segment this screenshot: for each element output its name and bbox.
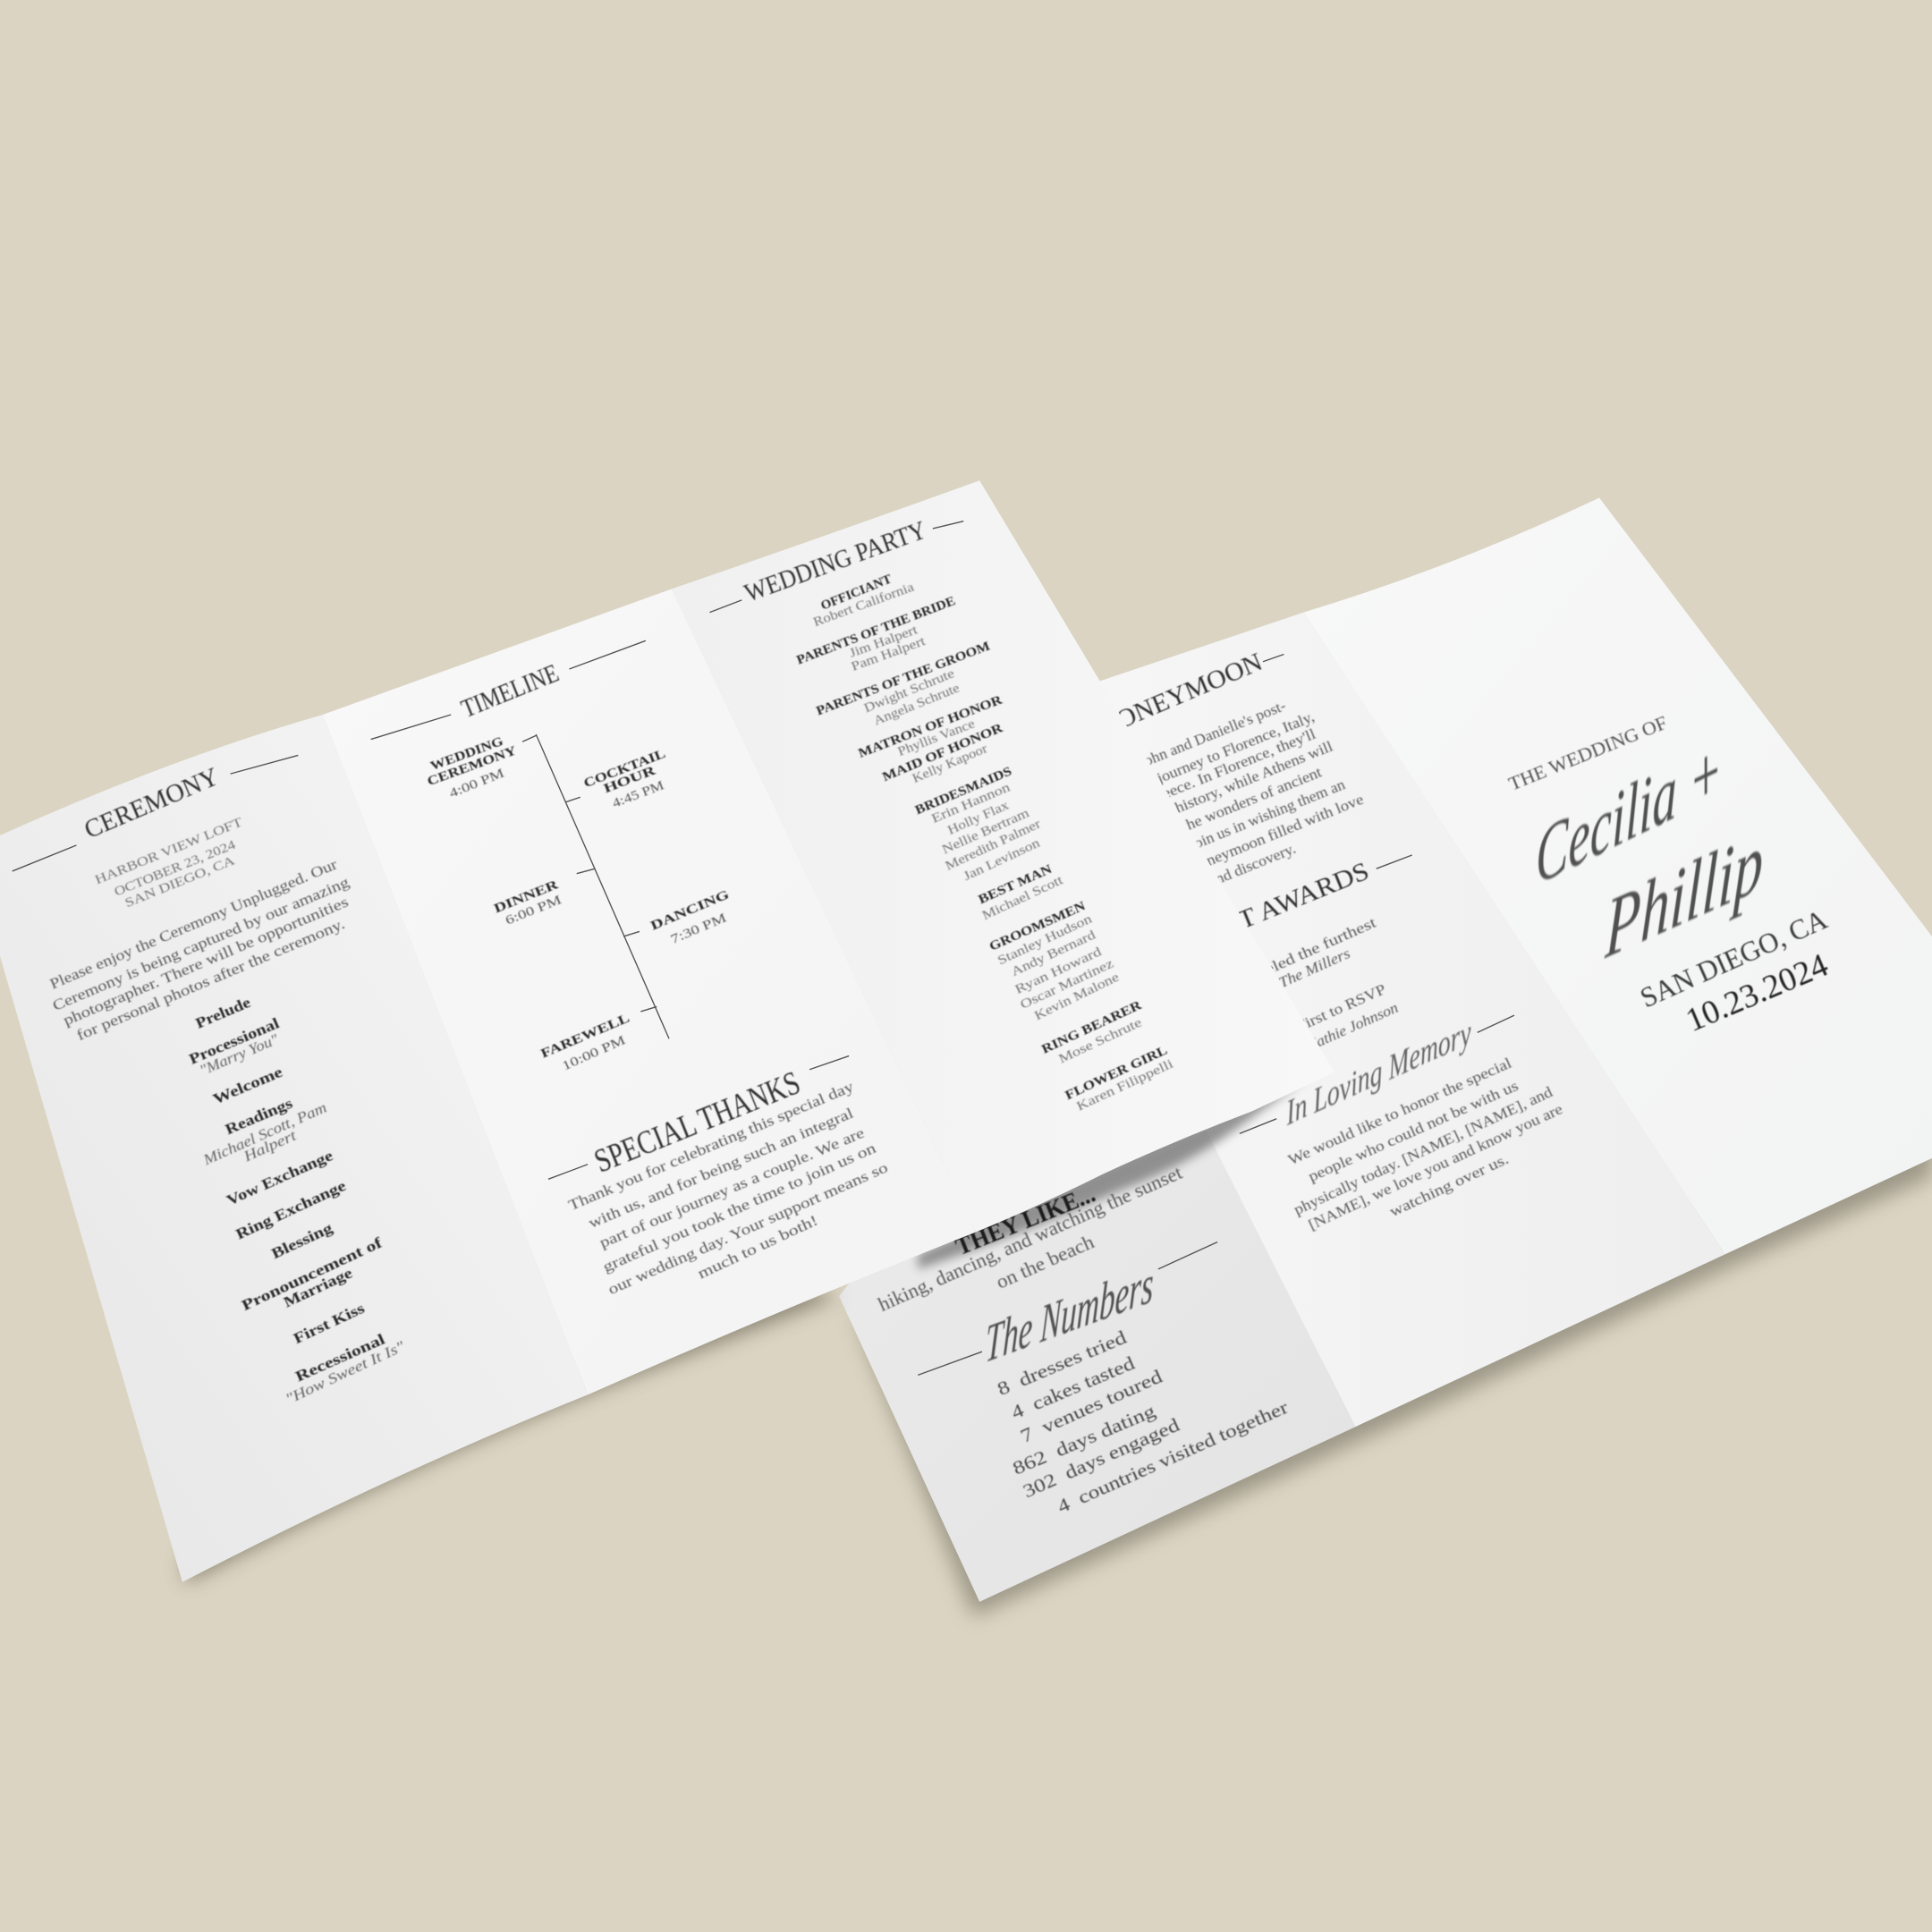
cover text [1506, 714, 1834, 1039]
heading: special thanks: SPECIAL THANKS [589, 1064, 805, 1181]
list: wedding party: PARENTS OF THE BRIDE [794, 594, 957, 668]
text block: honeymoon: and Greece. In Florence, they'll [1117, 725, 1318, 819]
text block: venue: HARBOR VIEW LOFT [93, 815, 245, 887]
cover: name one: Cecilia + [1536, 724, 1722, 902]
list: wedding party: Jan Levinson [962, 836, 1042, 884]
text block: special thanks: much to us both! [695, 1212, 820, 1283]
text block: venue: OCTOBER 23, 2024 [113, 838, 238, 900]
cover: date: 10.23.2024 [1681, 946, 1834, 1039]
timeline events: 4:45 PM [610, 778, 666, 811]
shadow: cast by upper brochure on lower brochure [918, 1078, 1306, 1269]
text block: honeymoon: Please join us in wishing them an [1147, 775, 1348, 870]
text block: guest awards: Traveled the furthest [1231, 914, 1378, 992]
heading: wedding party: WEDDING PARTY [741, 516, 930, 608]
text block: unplugged note [47, 855, 352, 1044]
list: wedding party: Ryan Howard [1013, 945, 1105, 997]
list: wedding party: Michael Scott [980, 873, 1065, 923]
list: order of service: "Marry You" [197, 1030, 282, 1079]
list: order of service: Pronouncement of [239, 1234, 385, 1314]
text block: in loving memory: physically today. [NAME], [NAME], and [1291, 1083, 1555, 1218]
list: wedding party: BRIDESMAIDS [913, 764, 1014, 818]
cover: name two: Phillip [1603, 812, 1765, 978]
panel: timeline [323, 589, 976, 1394]
list: wedding party: MATRON OF HONOR [856, 692, 1004, 761]
timeline events: 6:00 PM [504, 893, 564, 928]
text block: honeymoon [1099, 697, 1366, 890]
list: order of service: Readings [223, 1095, 295, 1138]
list: order of service: "How Sweet It Is" [283, 1337, 408, 1408]
text block: special thanks: part of our journey as a couple. We are [597, 1124, 867, 1251]
text block: special thanks: Thank you for celebrating this special day [566, 1078, 856, 1214]
timeline events: 10:00 PM [560, 1033, 628, 1074]
timeline events: 4:00 PM [447, 767, 506, 801]
list: wedding party: Andy Bernard [1009, 928, 1098, 979]
heading: in loving memory: In Loving Memory [1284, 1013, 1472, 1134]
list: order of service: Ring Exchange [233, 1177, 349, 1243]
timeline events: HOUR [602, 763, 658, 796]
list: wedding party: Pam Halpert [850, 634, 928, 674]
heading: ceremony: CEREMONY [80, 762, 223, 844]
list: order of service: Blessing [268, 1219, 335, 1262]
timeline events: 7:30 PM [669, 911, 729, 947]
heading: in loving memory [1240, 1013, 1514, 1134]
list: wedding party: Dwight Schrute [862, 666, 956, 716]
heading: timeline [371, 640, 646, 740]
text block: guest awards: First to RSVP [1293, 980, 1388, 1035]
text block: guest awards: The Millers [1276, 945, 1353, 991]
list: wedding party: OFFICIANT [818, 572, 894, 614]
text block: they like: THEY LIKE... [952, 1179, 1099, 1260]
list: wedding party: FLOWER GIRL [1063, 1043, 1170, 1103]
text block: special thanks: our wedding day. Your support means so [606, 1159, 890, 1298]
list: wedding party [794, 572, 1175, 1114]
text block: unplugged note: Please enjoy the Ceremony Unplugged. Our [47, 855, 340, 993]
list: order of service [187, 994, 408, 1408]
list: wedding party: Kevin Malone [1032, 970, 1122, 1023]
text block: honeymoon: wedding journey to Florence, Italy, [1099, 708, 1317, 809]
list: order of service: Welcome [210, 1063, 285, 1108]
text block: in loving memory: watching over us. [1386, 1150, 1512, 1220]
text block: unplugged note: photographer. There will be opportunities [61, 893, 352, 1030]
cover: location: SAN DIEGO, CA [1636, 903, 1832, 1013]
panel: ceremony [0, 715, 588, 1582]
list: wedding party: Angela Schrute [872, 681, 962, 728]
panel: cover [1303, 498, 1932, 1254]
list: wedding party: Phyllis Vance [896, 716, 977, 759]
list: wedding party: Jim Halpert [847, 623, 919, 661]
timeline events: FAREWELL [538, 1011, 632, 1062]
text block: venue [93, 815, 245, 911]
list: wedding party: GROOMSMEN [987, 899, 1089, 954]
list: order of service: Prelude [193, 994, 253, 1032]
text block: in loving memory: We would like to honor the special [1285, 1055, 1514, 1168]
timeline events: COCKTAIL [582, 747, 668, 791]
heading: guest awards: GUEST AWARDS [1165, 857, 1373, 962]
heading: honeymoon: HONEYMOON [1094, 648, 1267, 742]
list: order of service: Processional [187, 1014, 282, 1068]
heading: the numbers: The Numbers [985, 1252, 1155, 1375]
text block: they like: on the beach [993, 1230, 1097, 1293]
heading: ceremony [13, 755, 298, 871]
heading: the numbers [918, 1242, 1217, 1375]
text block: honeymoon: and discovery. [1206, 840, 1298, 890]
list: wedding party: Mose Schrute [1056, 1016, 1144, 1067]
list: the numbers: 4 cakes tasted [1009, 1353, 1139, 1423]
heading: timeline: TIMELINE [457, 659, 563, 724]
text block: guest awards [1231, 914, 1401, 1055]
lower brochure [839, 498, 1932, 1602]
list: wedding party: RING BEARER [1039, 998, 1144, 1057]
list: order of service: Vow Exchange [224, 1147, 335, 1209]
mockup scene [0, 480, 1932, 1623]
list: the numbers: 8 dresses tried [995, 1327, 1131, 1400]
text block: they like: hiking, dancing, and watching the sunset [875, 1161, 1185, 1316]
list: wedding party: Erin Hannon [929, 780, 1013, 826]
list: wedding party: Stanley Hudson [996, 912, 1094, 968]
text block: in loving memory: [NAME], we love you and know you are [1306, 1100, 1565, 1233]
list: wedding party: Meredith Palmer [943, 817, 1043, 874]
list: wedding party: Nellie Bertram [940, 806, 1032, 857]
list: the numbers: 302 days engaged [1021, 1415, 1183, 1502]
upper brochure [0, 480, 1335, 1582]
panel: wedding party [672, 480, 1335, 1233]
text block: honeymoon: offer the wonders of ancient [1147, 763, 1325, 849]
list: wedding party: Oscar Martinez [1018, 956, 1116, 1013]
list: wedding party: MAID OF HONOR [880, 721, 1005, 784]
list: wedding party: Holly Flax [945, 798, 1012, 838]
text block: honeymoon: honeymoon filled with love [1188, 791, 1366, 876]
list: the numbers [995, 1327, 1292, 1518]
shadow: cast by upper brochure on background [185, 1282, 838, 1583]
text block: guest awards: Kathie Johnson [1303, 999, 1401, 1055]
list: order of service: Michael Scott, Pam [199, 1098, 329, 1169]
list: order of service: Recessional [292, 1330, 387, 1385]
cover: the wedding of: THE WEDDING OF [1506, 714, 1670, 795]
list: wedding party: Robert California [811, 580, 917, 630]
text block: unplugged note: for personal photos after the ceremony. [74, 915, 347, 1044]
list: wedding party: PARENTS OF THE GROOM [814, 639, 992, 719]
timeline events: CEREMONY [426, 743, 519, 789]
list: wedding party: Kelly Kapoor [911, 741, 990, 786]
timeline events: DANCING [648, 887, 732, 934]
shadow: lower brochure [851, 1109, 1932, 1616]
text block: special thanks: with us, and for being such an integral [586, 1105, 856, 1232]
text block: venue: SAN DIEGO, CA [123, 853, 237, 911]
list: order of service: Halpert [240, 1126, 300, 1165]
text block: in loving memory: people who could not be with us [1306, 1077, 1521, 1185]
text block: special thanks [566, 1078, 890, 1298]
list: the numbers: 4 countries visited together [1055, 1398, 1292, 1518]
list: the numbers: 862 days dating [1010, 1402, 1158, 1479]
list: the numbers: 7 venues toured [1018, 1367, 1166, 1447]
list: order of service: First Kiss [291, 1300, 368, 1347]
text block: honeymoon: explore history, while Athens will [1123, 738, 1335, 836]
list: order of service: Marriage [281, 1264, 355, 1311]
list: wedding party: BEST MAN [977, 862, 1055, 907]
timeline events [426, 734, 732, 1074]
text block: special thanks: grateful you took the time to join us on [600, 1140, 878, 1275]
text block: honeymoon: John and Danielle's post- [1136, 697, 1289, 772]
panel: honeymoon and awards [1099, 613, 1725, 1427]
timeline events: DINNER [492, 877, 561, 916]
text block: unplugged note: Ceremony is being captured by our amazing [50, 873, 352, 1014]
timeline events: WEDDING [428, 734, 505, 774]
panel: numbers [839, 1084, 1355, 1602]
list: wedding party: Karen Filippelli [1074, 1057, 1175, 1114]
chart: timeline axis [522, 734, 669, 1038]
text block: in loving memory [1285, 1055, 1565, 1233]
